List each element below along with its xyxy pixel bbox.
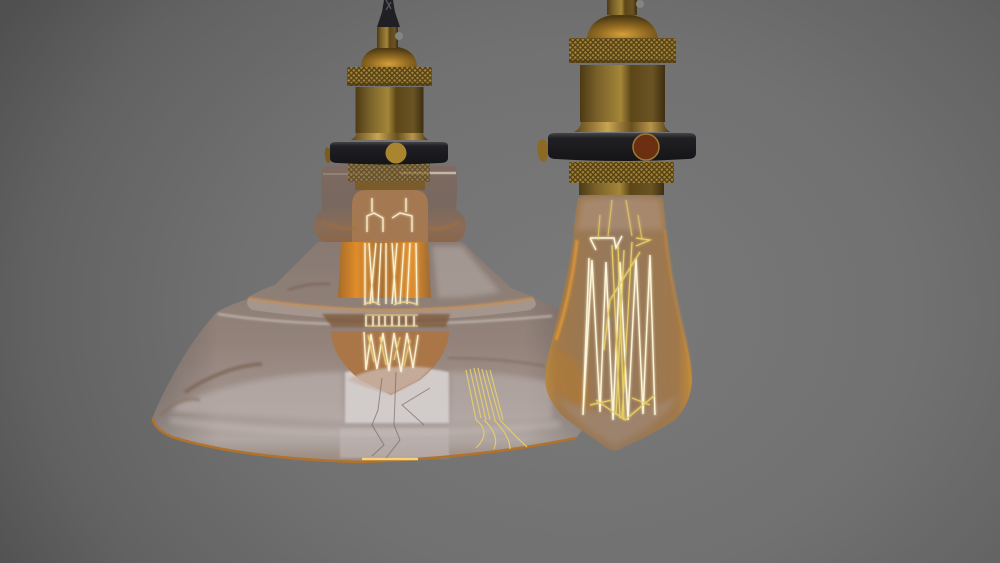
brass dot xyxy=(386,142,406,164)
black ring xyxy=(537,133,696,162)
white reflection xyxy=(172,372,344,422)
rim xyxy=(153,417,576,462)
socket black ring xyxy=(325,142,448,164)
inner glow column xyxy=(290,242,450,395)
cone highlight xyxy=(432,246,500,298)
rim band xyxy=(170,420,560,433)
shoulder rings xyxy=(247,298,536,320)
bulb glass xyxy=(545,193,692,451)
lower knurled ring xyxy=(569,162,674,183)
stem xyxy=(607,0,644,15)
dome xyxy=(587,14,658,38)
bottom collar xyxy=(579,183,664,195)
stem xyxy=(377,27,403,48)
brass cylinder xyxy=(351,87,428,140)
crack reflections xyxy=(372,372,430,458)
lamp: right edison bulb pendant xyxy=(537,0,696,451)
filament xyxy=(583,200,655,420)
copper dot xyxy=(633,134,659,160)
dome xyxy=(361,46,417,67)
dark tide line xyxy=(185,364,262,392)
shade body xyxy=(153,242,590,462)
socket inner knurl xyxy=(348,163,430,190)
knurled ring xyxy=(569,38,676,63)
glass neck xyxy=(314,166,466,242)
flared base xyxy=(574,122,670,132)
filament xyxy=(364,198,418,372)
reflected filament of bulb xyxy=(466,368,527,449)
brass cylinder xyxy=(580,65,665,122)
knurled ring xyxy=(347,67,432,86)
lamp: left glass shade pendant xyxy=(153,0,590,462)
cord xyxy=(377,0,400,27)
